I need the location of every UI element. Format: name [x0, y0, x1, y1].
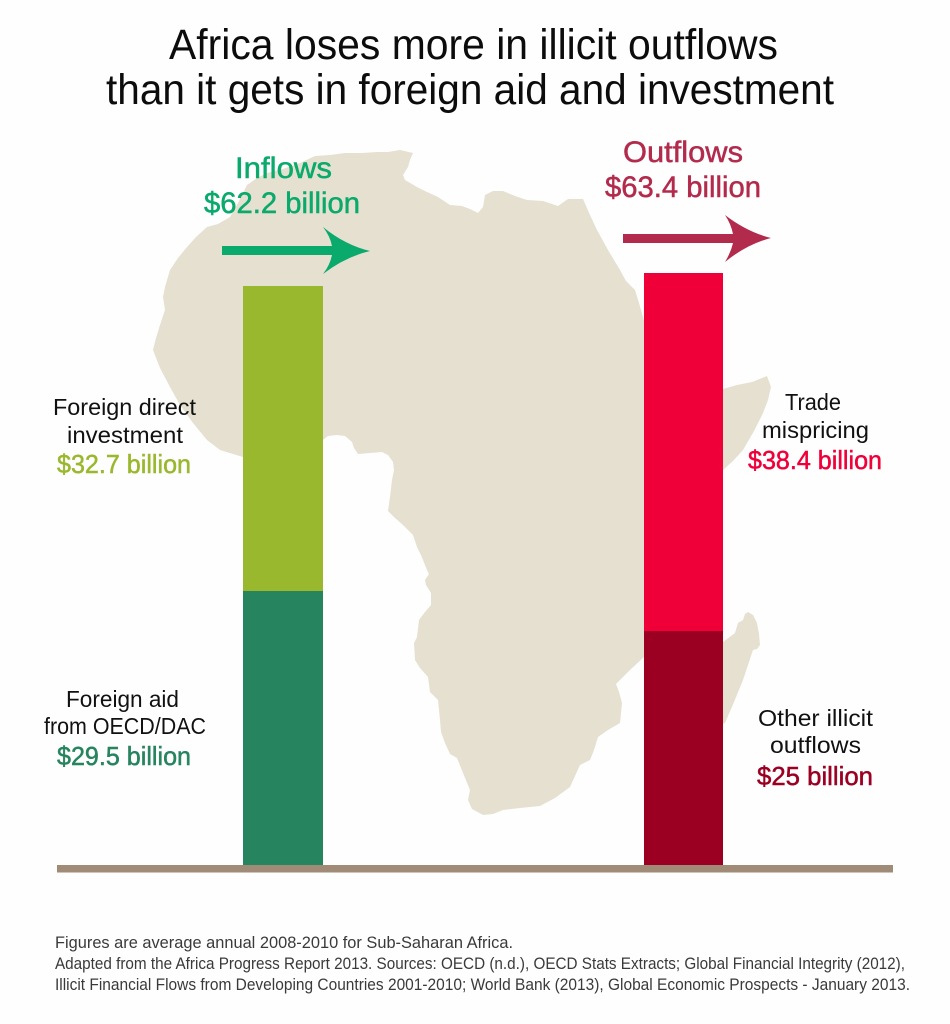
arrow: outflows — [623, 215, 771, 262]
title: than it gets in foreign aid and investment — [106, 66, 834, 114]
inflows heading — [204, 152, 360, 220]
label: trade mispricing: Trade — [785, 389, 841, 415]
title: Africa loses more in illicit outflows — [169, 21, 778, 69]
outflows stacked bar — [644, 273, 723, 865]
source note — [55, 934, 910, 994]
other illicit outflows segment — [644, 631, 723, 865]
map of Africa — [153, 150, 771, 815]
outflows heading: Outflows — [623, 136, 743, 169]
label: foreign direct investment: $32.7 billion — [57, 449, 191, 479]
label: trade mispricing — [748, 389, 882, 475]
label: foreign aid: $29.5 billion — [57, 741, 191, 771]
source note: Illicit Financial Flows from Developing Countries 2001-2010; World Bank (2013), Global Economic Prospects - January 2013. — [55, 976, 910, 994]
outflows heading — [605, 136, 761, 204]
label: trade mispricing: mispricing — [762, 417, 869, 443]
label: foreign aid: from OECD/DAC — [44, 713, 206, 739]
label: foreign aid: Foreign aid — [66, 686, 179, 712]
inflows stacked bar — [243, 286, 323, 865]
label: other illicit outflows: Other illicit — [758, 705, 874, 731]
source note: Adapted from the Africa Progress Report 2013. Sources: OECD (n.d.), OECD Stats Extracts; Global Financial Integrity (2012), — [55, 955, 905, 973]
label: other illicit outflows: $25 billion — [757, 761, 873, 791]
baseline — [57, 865, 893, 872]
label: other illicit outflows: outflows — [770, 732, 861, 758]
label: foreign direct investment — [53, 394, 197, 479]
outflows heading: $63.4 billion — [605, 171, 761, 204]
trade mispricing segment — [644, 273, 723, 631]
label: trade mispricing: $38.4 billion — [748, 445, 882, 475]
label: foreign direct investment: Foreign direct — [53, 394, 197, 420]
foreign aid segment — [243, 591, 323, 865]
inflows heading: Inflows — [235, 152, 332, 185]
inflows heading: $62.2 billion — [204, 187, 360, 220]
label: other illicit outflows — [757, 705, 874, 791]
label: foreign aid — [44, 686, 206, 771]
foreign direct investment segment — [243, 286, 323, 591]
arrow: inflows — [222, 227, 370, 274]
title — [106, 21, 834, 114]
source note: Figures are average annual 2008-2010 for Sub-Saharan Africa. — [55, 934, 513, 952]
label: foreign direct investment: investment — [67, 422, 184, 448]
